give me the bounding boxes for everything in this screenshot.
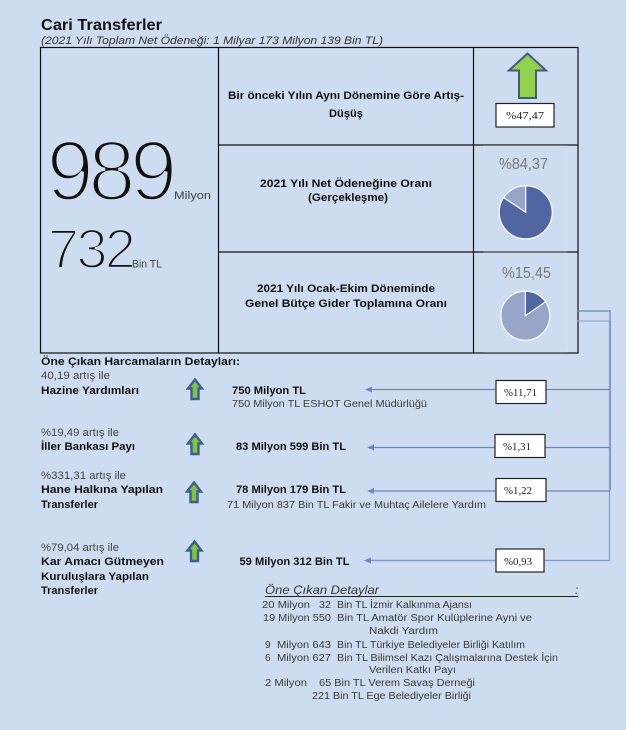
detail row: provincial bank share: %19,49 artış ile [41, 427, 119, 439]
highlighted details list: Bin TL İzmir Kalkınma Ajansı [337, 598, 472, 611]
highlighted details list: 20 Milyon [262, 600, 310, 611]
detail row: household transfers: Transferler [41, 499, 99, 511]
highlighted details list [262, 585, 578, 702]
value box: %11,71 [504, 387, 537, 399]
row label: ratio to general budget [245, 283, 447, 310]
list heading: : [575, 585, 578, 597]
highlighted details list: 9 [265, 640, 271, 651]
pie chart: 84,37 percent: %84,37 [499, 156, 548, 173]
summary table [40, 48, 578, 353]
row label: change over previous year: Düşüş [329, 108, 363, 120]
big number: 989 million: 989 [46, 124, 174, 219]
detail row: treasury aid [41, 370, 546, 410]
highlighted details list: Bin TL Amatör Spor Kulüplerine Ayni ve [337, 613, 532, 624]
arrow to amount [364, 558, 496, 564]
detail row: household transfers: Hane Halkına Yapılan [41, 484, 163, 496]
detail row: provincial bank share [41, 427, 545, 458]
section heading: highlighted expenditures: Öne Çıkan Harcamaların Detayları: [41, 355, 240, 368]
detail row: provincial bank share: 83 Milyon 599 Bin TL [236, 441, 346, 453]
detail row: non-profit transfers: %79,04 artış ile [41, 542, 119, 554]
detail row: treasury aid: 750 Milyon TL [232, 385, 306, 397]
detail row: non-profit transfers [41, 542, 544, 597]
row label: ratio to general budget: Genel Bütçe Gider Toplamına Oranı [245, 298, 447, 310]
arrow to amount [365, 386, 496, 392]
list heading [265, 585, 578, 597]
value box: 47,47 percent: %47,47 [506, 110, 545, 122]
detail row: non-profit transfers: Kar Amacı Gütmeyen [41, 556, 164, 568]
value box: 47,47 percent [496, 104, 554, 127]
row label: ratio to net budget [260, 177, 432, 204]
detail row: non-profit transfers: 59 Milyon 312 Bin TL [240, 556, 350, 568]
value box [496, 549, 544, 572]
icon: up arrow [188, 380, 202, 399]
detail row: household transfers: 71 Milyon 837 Bin TL Fakir ve Muhtaç Ailelere Yardım [227, 500, 486, 511]
detail row: provincial bank share: İller Bankası Payı [41, 440, 135, 453]
connector lines from pie to detail rows [544, 311, 610, 560]
row label: change over previous year: Bir önceki Yılın Aynı Dönemine Göre Artış- [228, 90, 464, 102]
icon: up arrow [187, 482, 201, 502]
highlighted details list: Milyon 627 [277, 653, 331, 664]
subtitle: (2021 Yılı Toplam Net Ödeneği: 1 Milyar 173 Milyon 139 Bin TL) [41, 35, 383, 47]
highlighted details list: 2 Milyon [265, 678, 307, 689]
detail row: treasury aid: 40,19 artış ile [41, 370, 110, 382]
value box: %1,31 [503, 441, 531, 453]
highlighted details list: Verilen Katkı Payı [369, 665, 456, 676]
row label: change over previous year [228, 90, 464, 120]
row label: ratio to net budget: 2021 Yılı Net Ödeneğine Oranı [260, 177, 432, 190]
highlighted details list: 221 Bin TL Ege Belediyeler Birliği [312, 691, 471, 702]
highlighted details list: Bin TL Türkiye Belediyeler Birliği Katılım [337, 640, 525, 651]
detail row: non-profit transfers: Kuruluşlara Yapılan [41, 571, 149, 583]
detail row: treasury aid: 750 Milyon TL ESHOT Genel Müdürlüğü [232, 399, 427, 410]
value box [496, 478, 546, 502]
icon: up arrow [188, 542, 202, 561]
highlighted details list: Bin TL Bilimsel Kazı Çalışmalarına Destek İçin [337, 651, 558, 664]
big number: 732 thousand: Bin TL [132, 258, 162, 270]
title: Cari Transferler [41, 17, 162, 34]
value box [495, 434, 545, 458]
big number: 989 million: Milyon [174, 190, 211, 202]
detail row: household transfers: %331,31 artış ile [41, 470, 126, 482]
pie chart: 15,45 percent [484, 253, 567, 352]
row label: ratio to general budget: 2021 Yılı Ocak-Ekim Döneminde [257, 283, 435, 295]
detail row: household transfers [41, 470, 546, 511]
pie chart: 84,37 percent [484, 146, 567, 251]
value box: %1,22 [504, 485, 532, 497]
highlighted details list: 19 Milyon 550 [263, 613, 331, 624]
arrow to amount [367, 488, 496, 494]
icon: large green up arrow [509, 54, 546, 98]
big number: 732 thousand: 732 [48, 217, 134, 280]
detail row: household transfers: 78 Milyon 179 Bin TL [236, 484, 346, 496]
detail row: non-profit transfers: Transferler [41, 585, 99, 597]
highlighted details list: Nakdi Yardım [369, 626, 438, 637]
highlighted details list: 32 [319, 600, 331, 611]
list heading: Öne Çıkan Detaylar [265, 585, 380, 597]
highlighted details list: 6 [265, 653, 271, 664]
pie chart: 15,45 percent: %15,45 [502, 265, 551, 282]
value box [496, 380, 546, 404]
highlighted details list: 65 Bin TL Verem Savaş Derneği [319, 678, 475, 689]
value box: %0,93 [504, 556, 532, 568]
highlighted details list: Milyon 643 [277, 640, 331, 651]
icon: up arrow [188, 434, 202, 454]
row label: ratio to net budget: (Gerçekleşme) [308, 192, 388, 204]
arrow to amount [367, 444, 495, 450]
detail row: treasury aid: Hazine Yardımları [41, 385, 139, 397]
